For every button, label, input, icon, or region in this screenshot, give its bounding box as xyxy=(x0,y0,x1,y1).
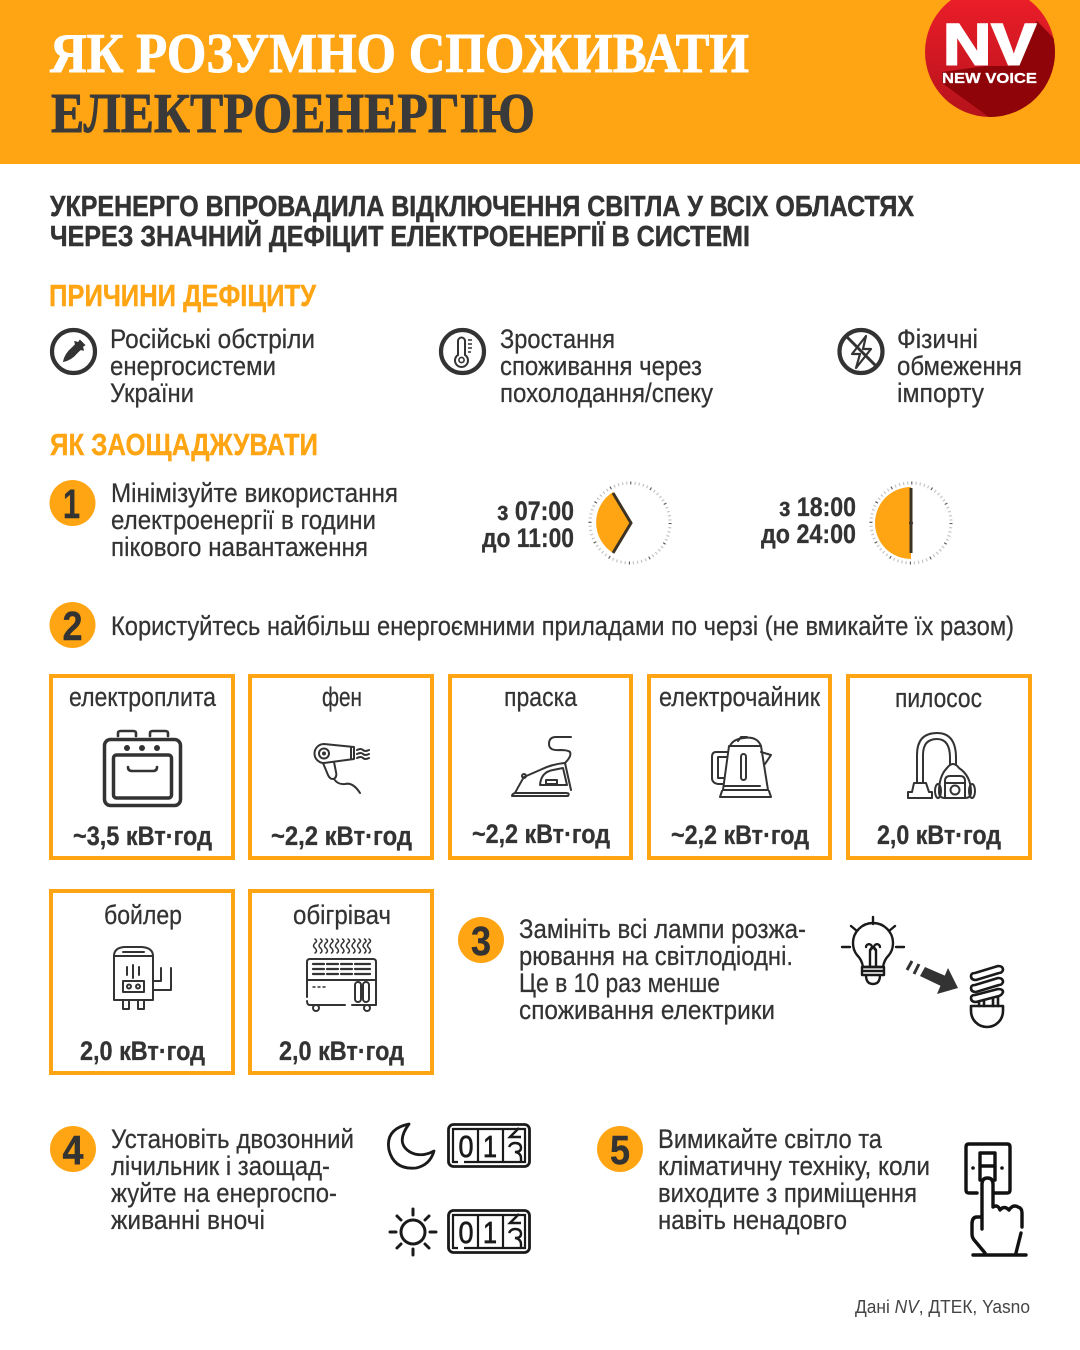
text: step 3: рювання на світлодіодні. xyxy=(519,941,793,971)
text: cause 1: Російські обстріли xyxy=(110,324,315,354)
text: step 4: лічильник і заощад- xyxy=(111,1151,330,1181)
logo: NV New Voice: NV xyxy=(943,12,1036,78)
logo: NV New Voice: NEW VOICE xyxy=(942,70,1037,87)
icon: vacuum xyxy=(908,733,975,798)
text: cause 3 xyxy=(897,324,1022,408)
text: step 1 xyxy=(111,478,398,562)
card: boiler: 2,0 кВт·год xyxy=(80,1036,205,1066)
icon: boiler xyxy=(114,947,171,1009)
card: vacuum cleaner: пилосос xyxy=(895,683,982,713)
icon: LED spiral bulb xyxy=(971,966,1003,1027)
title: ЯК РОЗУМНО СПОЖИВАТИ xyxy=(50,23,749,85)
arrow: replace bulb xyxy=(907,961,958,994)
text: cause 3: обмеження xyxy=(897,351,1022,381)
text: step 1: електроенергії в години xyxy=(111,505,376,535)
cause 1: shelling xyxy=(52,324,315,408)
icon: night meter: 0 xyxy=(458,1129,474,1164)
text: step 5: виходите з приміщення xyxy=(658,1178,917,1208)
text: step 3 xyxy=(519,914,806,1025)
icon: thermometer xyxy=(441,330,484,373)
icon: incandescent bulb xyxy=(842,917,904,984)
text: cause 1 xyxy=(110,324,315,408)
text: cause 3: імпорту xyxy=(897,378,984,408)
heading: how to save: ЯК ЗАОЩАДЖУВАТИ xyxy=(50,427,318,462)
card: electric stove: ~3,5 кВт·год xyxy=(73,821,212,851)
icon: night meter: 1 xyxy=(483,1129,497,1164)
icon: hand on switch xyxy=(966,1144,1026,1255)
icon: sun xyxy=(390,1209,436,1255)
number badge 2: 2 xyxy=(62,603,82,649)
text: cause 2: споживання через xyxy=(500,351,702,381)
icon: hair dryer xyxy=(314,744,369,793)
subtitle xyxy=(50,191,915,253)
evening peak time xyxy=(761,492,856,549)
cause 3: import limits xyxy=(840,324,1022,408)
text: step 4: живанні вночі xyxy=(111,1205,265,1235)
subtitle: УКРЕНЕРГО ВПРОВАДИЛА ВІДКЛЮЧЕННЯ СВІТЛА У ВСІХ ОБЛАСТЯХ xyxy=(50,191,915,223)
text: step 5: Вимикайте світло та xyxy=(658,1124,883,1154)
card: heater: обігрівач xyxy=(293,900,391,930)
text: cause 3: Фізичні xyxy=(897,324,978,354)
text: step 1: Мінімізуйте використання xyxy=(111,478,398,508)
text: step 5: навіть ненадовго xyxy=(658,1205,847,1235)
card: electric stove: електроплита xyxy=(69,682,217,712)
card: boiler: бойлер xyxy=(104,900,182,930)
title xyxy=(50,23,749,145)
header banner xyxy=(0,0,1080,164)
number badge 3 xyxy=(458,917,504,964)
step 3 xyxy=(458,914,1003,1027)
icon: missile xyxy=(52,330,95,373)
clock: 18 to 24 xyxy=(871,483,951,563)
text: step 5 xyxy=(658,1124,930,1235)
icon: kettle xyxy=(712,737,771,797)
text: step 5: кліматичну техніку, коли xyxy=(658,1151,930,1181)
heading: causes: ПРИЧИНИ ДЕФІЦИТУ xyxy=(49,278,317,313)
text: cause 2 xyxy=(500,324,713,408)
card: heater: 2,0 кВт·год xyxy=(279,1036,404,1066)
text: cause 2: похолодання/спеку xyxy=(500,378,713,408)
text: step 4: жуйте на енергоспо- xyxy=(111,1178,337,1208)
icon: day meter: 0 xyxy=(458,1215,474,1250)
step 2 xyxy=(50,602,1014,649)
subtitle: ЧЕРЕЗ ЗНАЧНИЙ ДЕФІЦИТ ЕЛЕКТРОЕНЕРГІЇ В СИСТЕМІ xyxy=(50,219,750,253)
number badge 4: 4 xyxy=(62,1127,84,1173)
clock: 07 to 11 xyxy=(590,483,670,563)
step 4 xyxy=(50,1124,530,1255)
number badge 5: 5 xyxy=(610,1127,630,1173)
card: heater xyxy=(250,891,432,1073)
icon: crossed lightning xyxy=(840,330,882,373)
card: hair dryer xyxy=(250,676,432,858)
text: step 4 xyxy=(111,1124,354,1235)
text: step 4: Установіть двозонний xyxy=(111,1124,354,1154)
card: iron xyxy=(450,676,631,858)
icon: day meter: 1 xyxy=(483,1215,497,1250)
number badge 4 xyxy=(50,1126,96,1173)
card: iron: праска xyxy=(504,682,578,712)
card: electric kettle xyxy=(649,676,830,858)
number badge 3: 3 xyxy=(471,918,491,964)
step 1 xyxy=(50,478,951,563)
card: hair dryer: фен xyxy=(322,682,362,712)
card: electric kettle: ~2,2 кВт·год xyxy=(671,820,809,850)
icon: night meter xyxy=(448,1124,530,1166)
icon: iron xyxy=(512,737,571,796)
icon: day meter xyxy=(448,1210,530,1252)
text: cause 1: України xyxy=(110,378,194,408)
number badge 5 xyxy=(597,1126,643,1173)
text: step 3: споживання електрики xyxy=(519,995,775,1025)
evening peak time: з 18:00 xyxy=(779,492,856,522)
number badge 1 xyxy=(50,480,96,527)
step 5 xyxy=(597,1124,1026,1255)
text: step 3: Замініть всі лампи розжа- xyxy=(519,914,806,944)
card: vacuum cleaner xyxy=(848,676,1030,858)
card: iron: ~2,2 кВт·год xyxy=(472,819,610,849)
cause 2: consumption xyxy=(441,324,713,408)
number badge 2 xyxy=(50,602,96,649)
card: electric kettle: електрочайник xyxy=(659,682,820,712)
morning peak time: до 11:00 xyxy=(482,523,574,553)
morning peak time: з 07:00 xyxy=(497,496,574,526)
text: cause 2: Зростання xyxy=(500,324,615,354)
card: vacuum cleaner: 2,0 кВт·год xyxy=(877,820,1001,850)
icon: moon xyxy=(388,1124,434,1168)
card: electric stove xyxy=(51,676,233,858)
text: step 1: пікового навантаження xyxy=(111,532,368,562)
morning peak time xyxy=(482,496,574,553)
source note: Дані NV, ДТЕК, Yasno xyxy=(855,1297,1030,1317)
icon: oven xyxy=(104,731,180,806)
title: ЕЛЕКТРОЕНЕРГІЮ xyxy=(51,83,535,145)
logo: NV New Voice xyxy=(925,0,1055,117)
evening peak time: до 24:00 xyxy=(761,519,856,549)
card: hair dryer: ~2,2 кВт·год xyxy=(271,821,412,851)
number badge 1: 1 xyxy=(63,481,80,527)
icon: heater xyxy=(307,939,376,1011)
text: cause 1: енергосистеми xyxy=(110,351,276,381)
card: boiler xyxy=(51,891,233,1073)
text: step 3: Це в 10 раз менше xyxy=(519,968,720,998)
